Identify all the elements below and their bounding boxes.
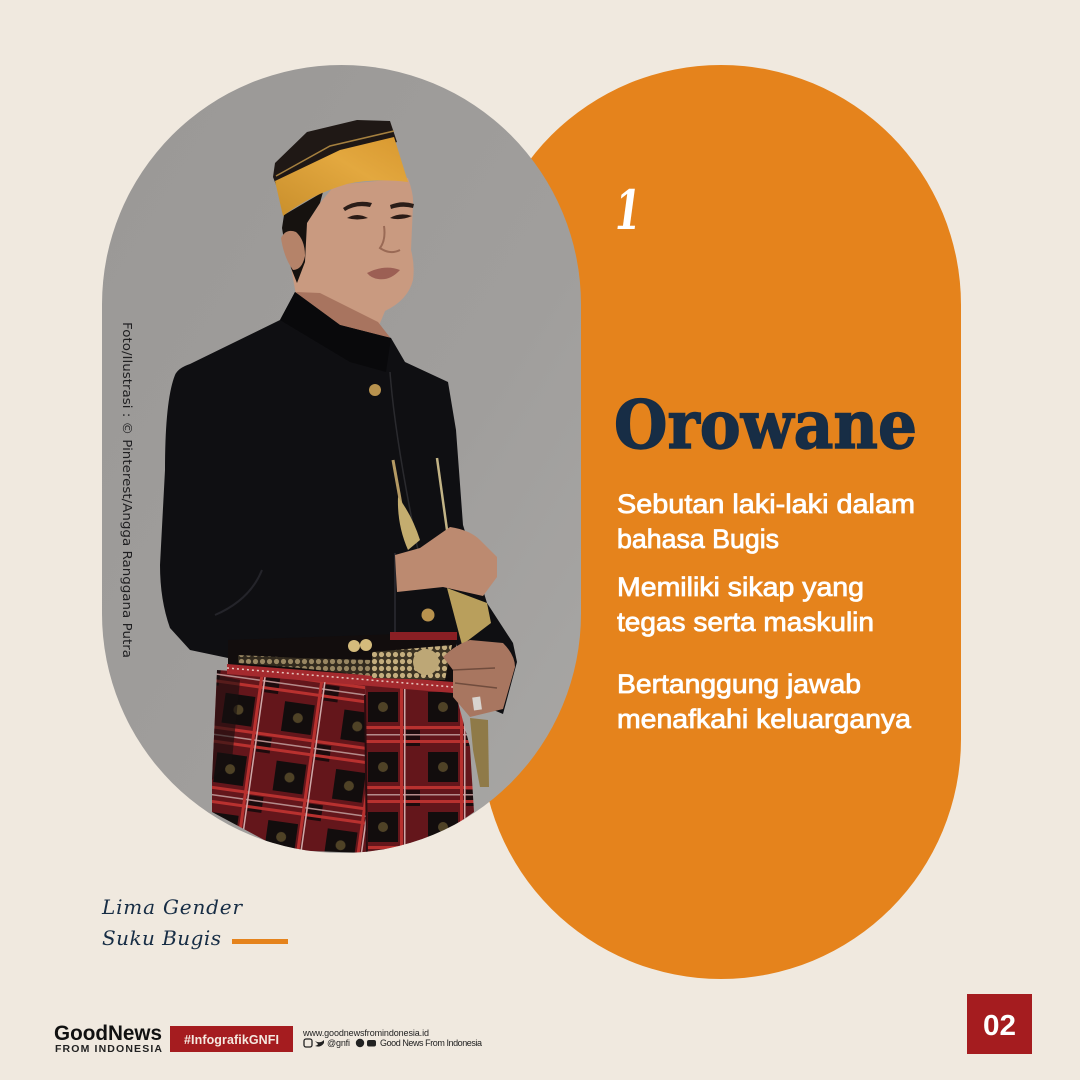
footer logo: GoodNews: [54, 1022, 162, 1045]
number: 1: [615, 178, 641, 242]
photo credit: Foto/Ilustrasi : © Pinterest/Angga Ranggana Putra: [120, 322, 134, 658]
page number badge: [967, 994, 1032, 1054]
heading: Orowane: [614, 386, 917, 464]
hashtag badge: [170, 1026, 293, 1052]
hashtag badge: #InfografikGNFI: [184, 1033, 279, 1047]
text block: description: tegas serta maskulin: [617, 607, 874, 637]
footer contact: www.goodnewsfromindonesia.id: [302, 1028, 429, 1038]
icon: embroidered belt: [227, 632, 457, 693]
footer contact: [302, 1028, 482, 1048]
icon: black jacket: [160, 292, 517, 714]
text block: description: Memiliki sikap yang: [617, 572, 864, 602]
text block: description: [617, 489, 915, 734]
icon: social icons: [304, 1039, 376, 1047]
series title: Lima Gender: [101, 895, 243, 919]
icon: gold jewellery: [369, 384, 491, 787]
icon: neck and face: [281, 178, 414, 338]
text block: description: Sebutan laki-laki dalam: [617, 489, 915, 519]
text block: description: menafkahi keluarganya: [617, 704, 912, 734]
panel: orange pill: [481, 65, 961, 979]
series title: [101, 895, 288, 950]
footer contact: @gnfi: [327, 1038, 350, 1048]
panel: photo of man in Bugis dress: [102, 65, 581, 853]
icon: sarong plaid: [212, 670, 474, 853]
footer contact: Good News From Indonesia: [380, 1038, 482, 1048]
icon: hands: [395, 527, 515, 717]
footer logo: [54, 1022, 162, 1055]
text block: description: bahasa Bugis: [617, 524, 779, 554]
icon: songkok hat: [273, 120, 408, 216]
series title: Suku Bugis: [102, 926, 221, 950]
footer logo: FROM INDONESIA: [55, 1043, 162, 1055]
text block: description: Bertanggung jawab: [617, 669, 861, 699]
page number badge: 02: [983, 1010, 1016, 1042]
